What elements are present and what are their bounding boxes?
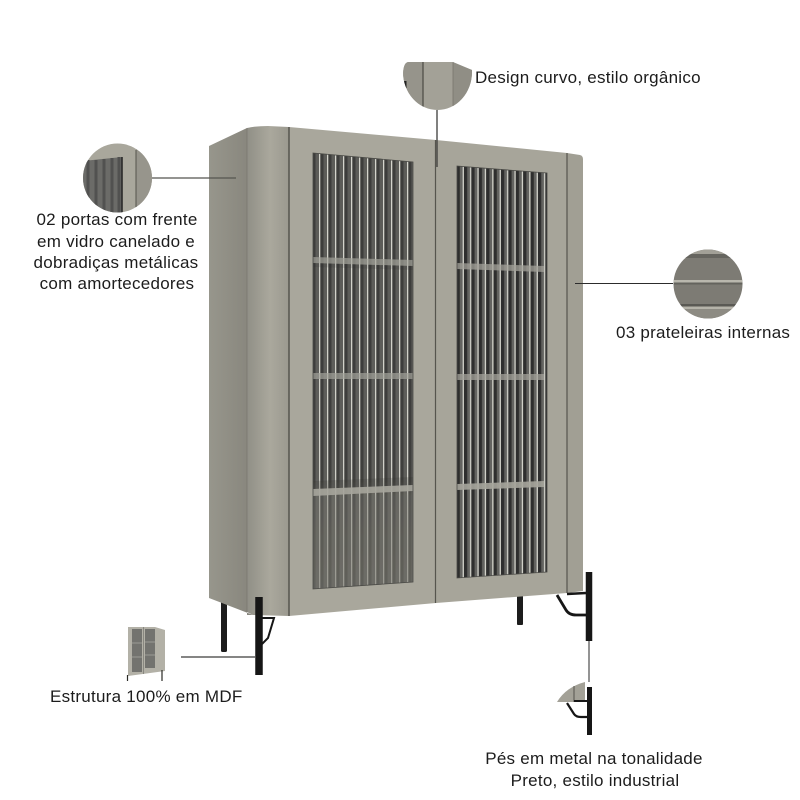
detail image: curved top <box>403 62 472 112</box>
callout: doors <box>34 143 236 293</box>
left glass door <box>313 154 413 589</box>
glass frame shadows <box>313 153 547 589</box>
right glass door <box>457 166 547 578</box>
label: com amortecedores <box>40 274 194 293</box>
side panel <box>209 128 253 615</box>
label: Estrutura 100% em MDF <box>50 687 243 706</box>
label: Preto, estilo industrial <box>511 771 679 790</box>
thumbnail cabinet <box>128 627 165 681</box>
label: dobradiças metálicas <box>34 253 198 272</box>
front left leg <box>259 597 274 675</box>
label: 02 portas com frente <box>36 210 198 229</box>
callout: curved design <box>403 62 701 167</box>
detail image: fluted glass <box>83 143 153 213</box>
label <box>485 749 703 790</box>
curved corner panel <box>247 126 289 616</box>
detail image: shelves <box>673 249 743 319</box>
callout: MDF structure <box>50 627 255 706</box>
callout: shelves <box>575 249 790 342</box>
label: Design curvo, estilo orgânico <box>475 68 701 87</box>
front right leg <box>557 572 589 641</box>
legs behind body <box>221 594 523 652</box>
leader line <box>152 177 236 179</box>
callout: metal feet <box>485 641 703 790</box>
leader line <box>181 656 255 658</box>
leader line <box>575 282 673 284</box>
label: Pés em metal na tonalidade <box>485 749 703 768</box>
leader line <box>436 110 438 167</box>
panel seams <box>247 127 567 616</box>
leader line <box>588 641 590 682</box>
right side edge <box>567 153 583 593</box>
right door <box>436 140 567 603</box>
cabinet <box>209 126 583 652</box>
label: 03 prateleiras internas <box>616 323 790 342</box>
label: em vidro canelado e <box>37 232 195 251</box>
left door <box>289 127 436 616</box>
detail image: leg bracket <box>557 682 592 735</box>
label <box>34 210 198 293</box>
